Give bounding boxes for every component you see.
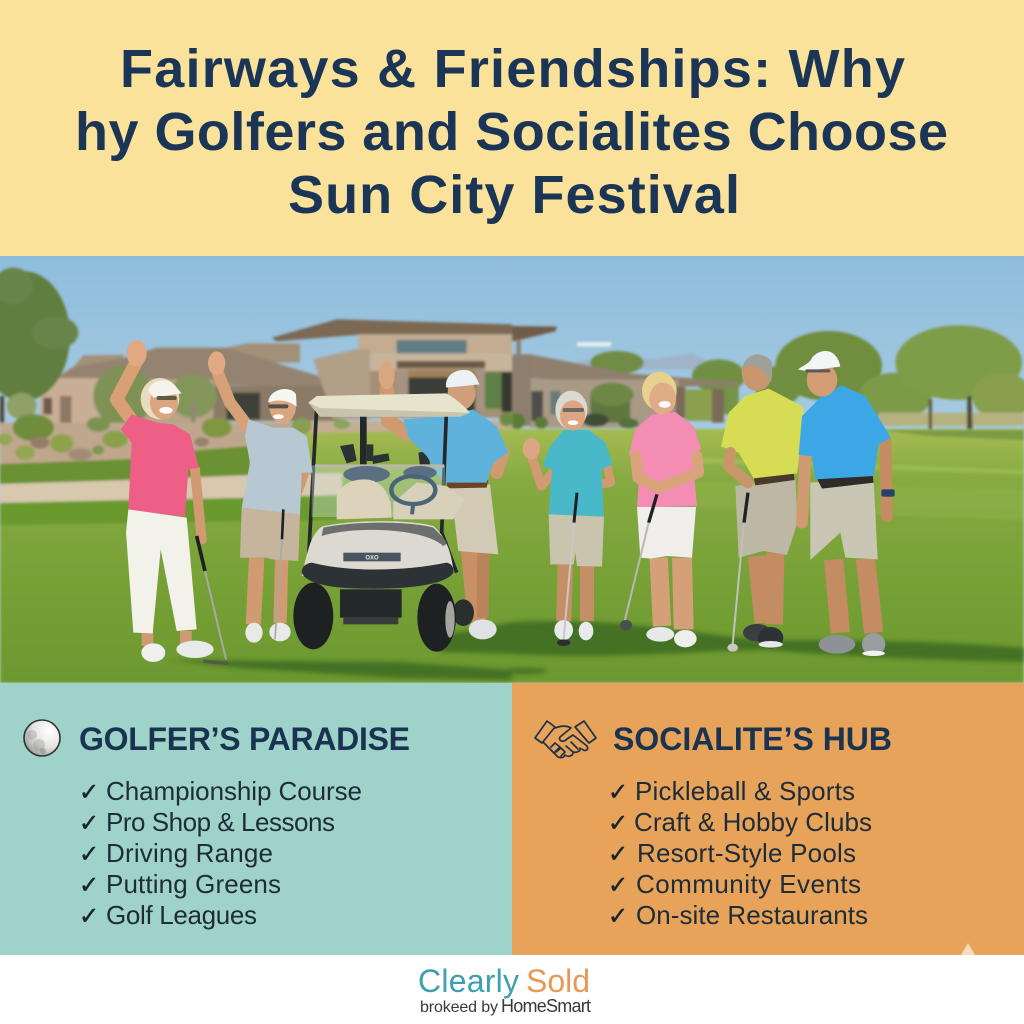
- title banner: [0, 0, 1024, 256]
- checklist: social amenities: ✓: [608, 840, 628, 868]
- checklist: social amenities: ✓: [608, 809, 628, 837]
- golf cart: [293, 393, 474, 652]
- checklist: golf amenities: ✓: [79, 902, 99, 930]
- people and cart on left half: [117, 340, 508, 663]
- woman in teal shirt: [523, 391, 613, 646]
- man in blue shirt with white cap: [798, 351, 895, 656]
- checklist: golf amenities: [79, 776, 362, 930]
- golf cart: OXO: [365, 555, 379, 561]
- woman in patterned shirt, waving: [208, 351, 313, 643]
- right side background: [509, 325, 1024, 431]
- checklist: golf amenities: ✓: [79, 840, 99, 868]
- checklist: social amenities: [608, 776, 872, 930]
- man in yellow shirt: [721, 354, 805, 652]
- checklist: social amenities: Community Events: [636, 869, 861, 899]
- checklist: golf amenities: Championship Course: [106, 776, 362, 806]
- woman in light pink shirt: [620, 372, 701, 647]
- footer logo: [0, 955, 1024, 1024]
- title text: Fairways & Friendships: Why: [120, 39, 905, 99]
- footer logo: brokeed by: [420, 999, 498, 1016]
- heading: GOLFER’S PARADISE: [79, 721, 410, 757]
- checklist: social amenities: Resort-Style Pools: [637, 838, 856, 868]
- man in blue shirt, waving: [379, 361, 508, 639]
- icon: handshake: [535, 721, 596, 758]
- woman in pink shirt, waving: [117, 340, 214, 662]
- background: clubhouse, trees and fairway: [0, 268, 1024, 683]
- heading: SOCIALITE’S HUB: [613, 721, 892, 757]
- title text: hy Golfers and Socialites Choose: [75, 102, 948, 162]
- club of woman in pink: [197, 536, 228, 663]
- footer logo: HomeSmart: [501, 996, 591, 1016]
- panel: golfer's paradise: [0, 683, 512, 955]
- people on right half: [523, 351, 895, 656]
- photo: golfers on the course: [0, 256, 1024, 683]
- checklist: social amenities: ✓: [608, 778, 628, 806]
- small pale triangle mark: [961, 943, 975, 955]
- checklist: golf amenities: ✓: [79, 809, 99, 837]
- panel: socialite's hub: [512, 683, 1024, 955]
- footer logo: Sold: [526, 963, 590, 999]
- checklist: golf amenities: Driving Range: [106, 838, 273, 868]
- checklist: social amenities: ✓: [608, 902, 628, 930]
- checklist: social amenities: Pickleball & Sports: [635, 776, 855, 806]
- checklist: social amenities: Craft & Hobby Clubs: [634, 807, 872, 837]
- footer logo: Clearly: [418, 963, 519, 999]
- checklist: golf amenities: ✓: [79, 871, 99, 899]
- golf cart back parts: [340, 416, 430, 466]
- ground shadows: [170, 621, 1024, 680]
- icon: golf ball: [24, 720, 60, 756]
- checklist: golf amenities: Golf Leagues: [106, 900, 257, 930]
- checklist: golf amenities: Putting Greens: [106, 869, 281, 899]
- checklist: golf amenities: ✓: [79, 778, 99, 806]
- left side background: [0, 268, 514, 473]
- fairway: [0, 429, 1024, 683]
- sand path: [0, 473, 342, 503]
- checklist: social amenities: On-site Restaurants: [636, 900, 868, 930]
- checklist: golf amenities: Pro Shop & Lessons: [106, 807, 335, 837]
- title text: Sun City Festival: [288, 165, 740, 225]
- title text: [75, 39, 948, 225]
- checklist: social amenities: ✓: [608, 871, 628, 899]
